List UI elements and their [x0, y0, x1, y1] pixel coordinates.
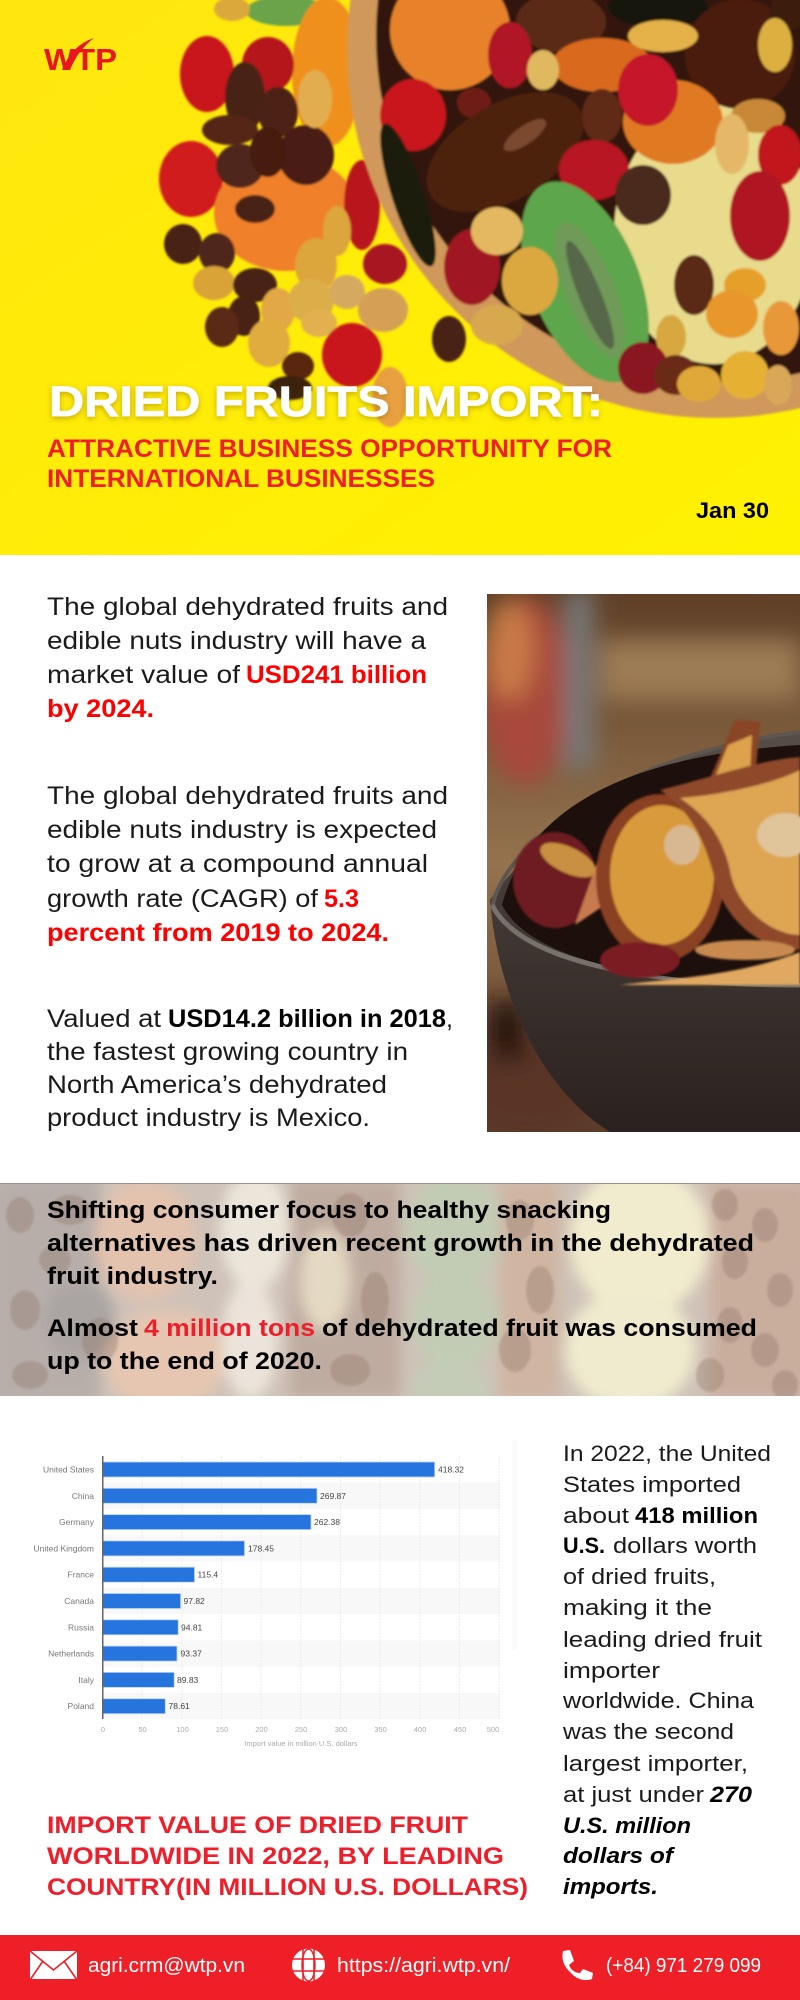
text block: 2022 import summary: 270: [709, 1782, 753, 1807]
bar chart: import value by country: Netherlands: [48, 1649, 94, 1659]
bar chart: import value by country: 93.37: [180, 1649, 202, 1659]
text block: 2022 import summary: making it the: [563, 1595, 712, 1620]
text: phone number: (+84) 971 279 099: [606, 1955, 761, 1977]
bar chart: import value by country: Russia: [68, 1622, 94, 1632]
panel: hero banner: [0, 0, 800, 555]
bar chart: import value by country: 178.45: [248, 1543, 274, 1553]
text block: 2022 import summary: worldwide. China: [562, 1688, 755, 1713]
image: dried pear slices in bowl: [460, 590, 800, 1140]
text block: Mexico: the fastest growing country in: [47, 1038, 408, 1066]
bar chart: import value by country: 0: [101, 1725, 105, 1734]
subtitle: INTERNATIONAL BUSINESSES: [47, 465, 435, 493]
bar chart: import value by country: 300: [335, 1725, 347, 1734]
bar chart: import value by country: 262.38: [314, 1517, 340, 1527]
text block: Mexico: [47, 1005, 453, 1132]
bar chart: import value by country: Italy: [78, 1675, 95, 1685]
bar chart: import value by country: 418.32: [438, 1464, 464, 1474]
subtitle: ATTRACTIVE BUSINESS OPPORTUNITY FOR: [47, 435, 612, 463]
text block: market value: market value of: [47, 661, 240, 689]
bar chart: import value by country: Canada: [64, 1596, 94, 1606]
text: consumer focus: 4 million tons: [144, 1315, 315, 1342]
text block: 2022 import summary: dollars of: [563, 1843, 676, 1868]
text: consumer focus: alternatives has driven recent growth in the dehydrated: [47, 1230, 754, 1257]
bar chart: import value by country: 350: [374, 1725, 387, 1734]
image: faded dried fruit background: [0, 1184, 800, 1396]
date: Jan 30: [696, 498, 769, 523]
text: consumer focus: [47, 1197, 757, 1375]
text block: 2022 import summary: In 2022, the United: [563, 1441, 771, 1466]
bar chart: import value by country: United Kingdom: [34, 1543, 94, 1553]
logo: WTP: WTP: [44, 42, 117, 77]
text block: growth rate: 5.3: [324, 885, 359, 913]
icon: phone: [562, 1950, 593, 1980]
bar chart: import value by country: 100: [176, 1725, 189, 1734]
bar chart: import value by country: Import value in million U.S. dollars: [244, 1739, 358, 1748]
image: wooden bowl of dried fruit: [347, 0, 800, 418]
bar chart: import value by country: France: [68, 1570, 94, 1580]
logo: WTP: [44, 38, 116, 70]
bar chart: import value by country: 200: [255, 1725, 268, 1734]
icon: envelope: [30, 1951, 77, 1980]
text: consumer focus: Shifting consumer focus to healthy snacking: [47, 1197, 611, 1224]
text block: 2022 import summary: 418 million: [635, 1503, 758, 1528]
text block: 2022 import summary: about: [563, 1503, 629, 1528]
bar chart: import value by country: Poland: [68, 1701, 94, 1711]
heading: chart title: WORLDWIDE IN 2022, BY LEADING: [47, 1843, 504, 1870]
text block: market value: USD241 billion: [246, 661, 427, 689]
text block: market value: by 2024.: [47, 695, 154, 723]
text block: 2022 import summary: dollars worth: [613, 1533, 757, 1558]
text block: market value: [47, 593, 448, 723]
text: consumer focus: up to the end of 2020.: [47, 1348, 322, 1375]
bowl: [490, 732, 800, 1140]
text block: Mexico: Valued at: [47, 1005, 161, 1033]
text block: 2022 import summary: [562, 1441, 771, 1899]
bar chart: import value by country: 89.83: [177, 1675, 199, 1685]
bar chart: import value by country: 250: [295, 1725, 307, 1734]
text: website: https://agri.wtp.vn/: [337, 1955, 510, 1977]
text block: Mexico: ,: [446, 1005, 453, 1033]
text block: growth rate: growth rate (CAGR) of: [47, 885, 318, 913]
text block: growth rate: percent from 2019 to 2024.: [47, 919, 389, 947]
text block: Mexico: North America’s dehydrated: [47, 1071, 387, 1099]
text block: Mexico: product industry is Mexico.: [47, 1104, 370, 1132]
text block: 2022 import summary: at just under: [563, 1782, 704, 1807]
bar chart: import value by country: 269.87: [320, 1491, 346, 1501]
text: consumer focus: Almost: [47, 1315, 138, 1342]
heading: chart title: [47, 1812, 528, 1901]
image: scattered dried fruit: [159, 0, 466, 427]
bar chart: import value by country: 78.61: [168, 1701, 190, 1711]
text block: Mexico: USD14.2 billion in 2018: [168, 1005, 446, 1033]
bar chart: import value by country: [34, 1440, 517, 1748]
text block: market value: The global dehydrated fruits and: [47, 593, 448, 621]
text block: 2022 import summary: U.S.: [563, 1533, 605, 1558]
text: email: agri.crm@wtp.vn: [88, 1955, 245, 1977]
bar chart: import value by country: 115.4: [198, 1570, 218, 1580]
text block: growth rate: to grow at a compound annual: [47, 850, 428, 878]
panel: contact footer: [0, 1935, 800, 2000]
text block: growth rate: The global dehydrated fruits and: [47, 782, 448, 810]
bar chart: import value by country: 50: [138, 1725, 147, 1734]
fruit: [513, 720, 800, 985]
bar chart: import value by country: 94.81: [181, 1622, 203, 1632]
text block: 2022 import summary: U.S. million: [563, 1813, 691, 1838]
text: consumer focus: fruit industry.: [47, 1263, 218, 1290]
bar chart: import value by country: 97.82: [184, 1596, 205, 1606]
bar chart: import value by country: 150: [216, 1725, 228, 1734]
text block: 2022 import summary: leading dried fruit: [563, 1627, 762, 1652]
bar chart: import value by country: Germany: [59, 1517, 95, 1527]
text block: 2022 import summary: of dried fruits,: [563, 1564, 716, 1589]
text: consumer focus: of dehydrated fruit was consumed: [322, 1315, 757, 1342]
subtitle: [48, 439, 612, 487]
text block: 2022 import summary: largest importer,: [563, 1751, 748, 1776]
text block: 2022 import summary: importer: [563, 1658, 660, 1683]
panel: consumer focus band: [0, 1184, 800, 1396]
text block: 2022 import summary: imports.: [563, 1874, 658, 1899]
heading: chart title: COUNTRY(IN MILLION U.S. DOLLARS): [47, 1874, 528, 1901]
bar chart: import value by country: United States: [43, 1464, 94, 1474]
icon: globe: [292, 1948, 325, 1982]
title: DRIED FRUITS IMPORT:: [49, 378, 603, 426]
text block: 2022 import summary: States imported: [563, 1472, 741, 1497]
bar chart: import value by country: China: [72, 1491, 94, 1501]
text block: market value: edible nuts industry will have a: [47, 627, 426, 655]
bar chart: import value by country: 400: [414, 1725, 426, 1734]
bar chart: import value by country: 500: [487, 1725, 499, 1734]
text block: growth rate: [47, 782, 448, 947]
text block: growth rate: edible nuts industry is expected: [47, 816, 437, 844]
text block: 2022 import summary: was the second: [562, 1719, 734, 1744]
bar chart: import value by country: 450: [454, 1725, 466, 1734]
heading: chart title: IMPORT VALUE OF DRIED FRUIT: [47, 1812, 468, 1839]
